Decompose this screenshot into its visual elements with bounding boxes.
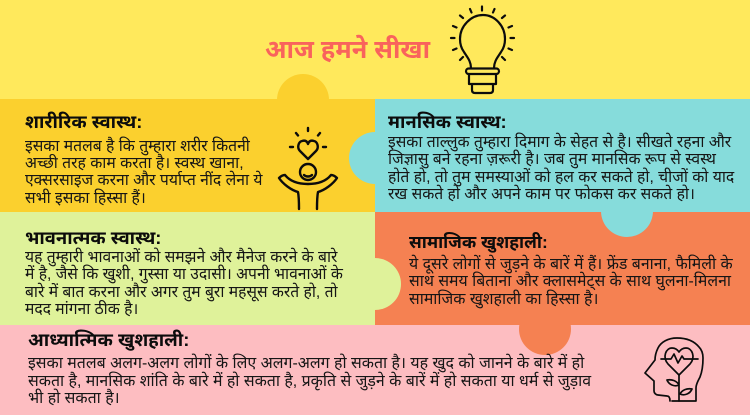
text: emotional health [25, 248, 344, 318]
puzzle tab: social panel bottom [519, 303, 571, 355]
panel: spiritual wellbeing [0, 325, 750, 415]
text: physical health [25, 136, 263, 207]
text: physical health: सभी इसका हिस्सा हैं। [25, 190, 146, 207]
panel: mental health [375, 99, 750, 212]
text: mental health: इसका ताल्लुक तुम्हारा दिमाग के सेहत से है। सीखते रहना और [388, 134, 731, 151]
text: emotional health: में है, जैसे कि खुशी, गुस्सा या उदासी। अपनी भावनाओं के [25, 266, 343, 283]
heading: physical health: शारीरिक स्वास्थ: [25, 111, 142, 132]
icon: person with heart [278, 126, 338, 210]
text: physical health: एक्सरसाइज करना और पर्याप्त नींद लेना ये [25, 172, 262, 189]
puzzle tab: mental panel left [349, 132, 401, 184]
text: spiritual wellbeing: सकता है, मानसिक शांति के बारे में हो सकता है, प्रकृति से जुड़ने के बारें में हो सकता या धर्म से जुड़ाव [28, 372, 591, 390]
text: mental health [388, 132, 734, 203]
panel: social wellbeing [375, 212, 750, 325]
puzzle tab: emotional panel right [349, 258, 401, 310]
icon: light bulb [450, 5, 516, 94]
heading: emotional health: भावनात्मक स्वास्थ: [25, 227, 161, 248]
heading: spiritual wellbeing: आध्यात्मिक खुशहाली: [28, 329, 189, 350]
heading: mental health: मानसिक स्वास्थ: [388, 111, 507, 132]
text: social wellbeing: सामाजिक खुशहाली का हिस्सा है। [409, 291, 598, 308]
text: emotional health: यह तुम्हारी भावनाओं को समझने और मैनेज करने के बारे [25, 249, 337, 266]
text: spiritual wellbeing: भी हो सकता है। [28, 390, 120, 407]
puzzle tab: mental panel bottom [601, 185, 653, 237]
text: social wellbeing: साथ समय बिताना और क्लासमेट्स के साथ घुलना-मिलना [409, 273, 731, 290]
text: emotional health: मदद मांगना ठीक है। [25, 301, 138, 318]
icon: head with heart flower [644, 337, 704, 402]
text: social wellbeing: ये दूसरे लोगों से जुड़ने के बारें में हैं। फ्रेंड बनाना, फैमिली के [409, 256, 733, 273]
text: mental health: होते हो, तो तुम समस्याओं को हल कर सकते हो, चीजों को याद [388, 169, 734, 186]
puzzle tab: physical panel top [277, 74, 329, 126]
panel: physical health [0, 99, 375, 212]
text: physical health: अच्छी तरह काम करता है। स्वस्थ खाना, [25, 155, 244, 172]
title: आज हमने सीखा [265, 36, 430, 64]
text: mental health: रख सकते हो और अपने काम पर फोकस कर सकते हो। [388, 186, 695, 203]
heading: social wellbeing: सामाजिक खुशहाली: [409, 232, 548, 252]
text: physical health: इसका मतलब है कि तुम्हारा शरीर कितनी [25, 138, 250, 154]
panel: emotional health [0, 212, 375, 325]
text: emotional health: बारे में बात करना और अगर तुम बुरा महसूस करते हो, तो [25, 284, 338, 301]
text: mental health: जिज्ञासु बने रहना ज़रूरी है। जब तुम मानसिक रूप से स्वस्थ [388, 151, 716, 168]
text: social wellbeing [409, 254, 733, 308]
text: spiritual wellbeing: इसका मतलब अलग-अलग लोगों के लिए अलग-अलग हो सकता है। यह खुद को जानने के बारे में हो [28, 355, 584, 372]
text: spiritual wellbeing [28, 354, 592, 407]
